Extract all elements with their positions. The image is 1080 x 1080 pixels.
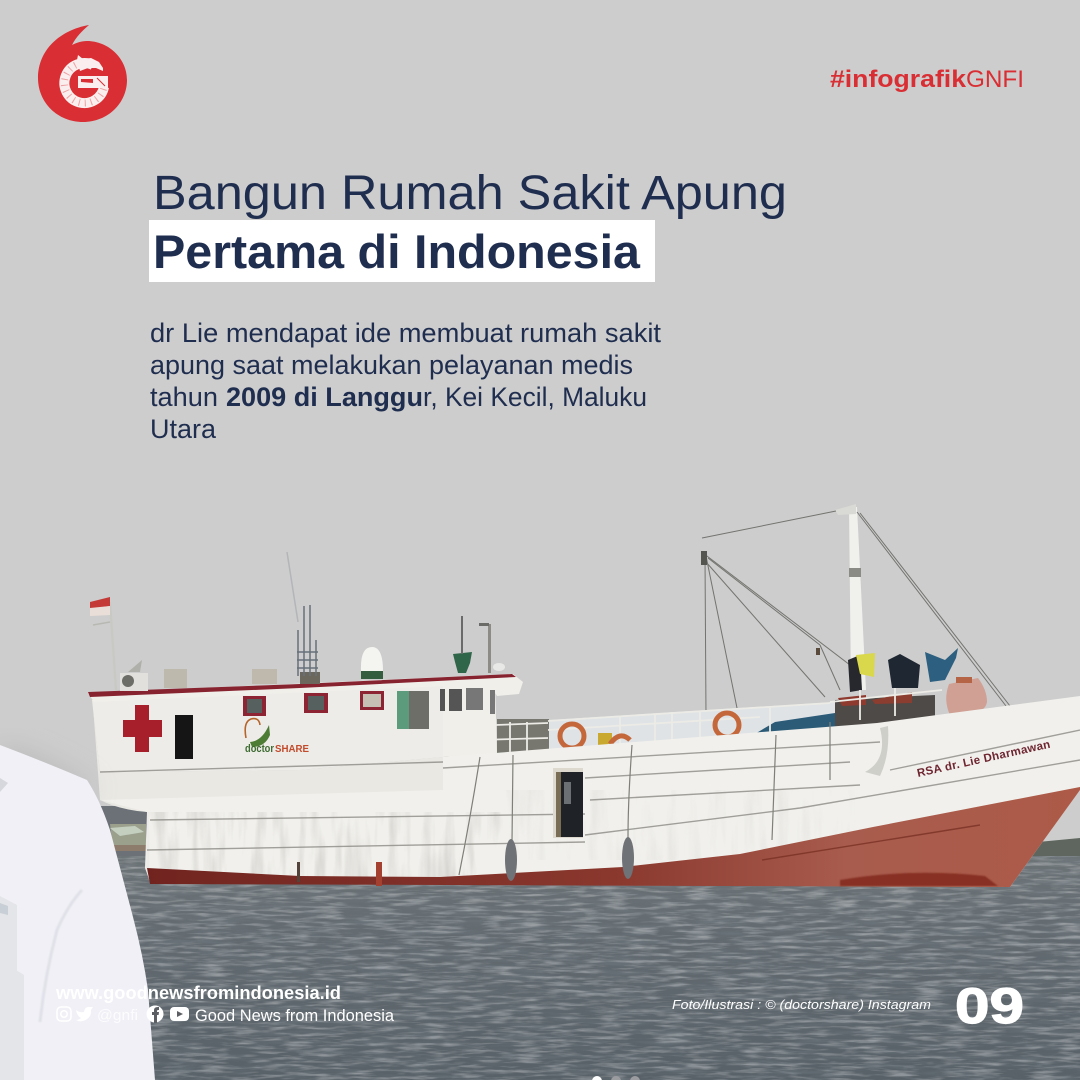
description text: Utara	[150, 414, 216, 444]
ship: flag mast	[90, 597, 142, 690]
hashtag	[830, 66, 1024, 93]
ship: roof equipment	[120, 552, 505, 691]
title line 1: Bangun Rumah Sakit Apung	[153, 167, 787, 220]
description text: tahun	[150, 382, 218, 412]
ship: fenders	[505, 837, 634, 881]
hashtag: GNFI	[966, 66, 1024, 93]
social handle: @gnfi	[97, 1007, 138, 1024]
hashtag: #infografik	[830, 66, 967, 93]
description text	[150, 318, 662, 444]
description text: 2009 di Langgu	[226, 382, 423, 412]
doctorSHARE logo on ship: SHARE	[275, 743, 309, 755]
ship: main hull	[100, 696, 1080, 887]
sea	[0, 856, 1080, 1080]
person in white coat	[0, 745, 155, 1080]
icon: facebook	[146, 1006, 164, 1023]
carousel dots	[592, 1076, 640, 1080]
ship: drying laundry	[848, 648, 958, 692]
doctorSHARE logo on ship	[245, 719, 309, 755]
icon: twitter	[76, 1007, 93, 1021]
ship: water tank	[946, 677, 987, 715]
ship: stern hull	[93, 706, 580, 884]
doctorSHARE logo on ship: doctor	[245, 743, 275, 755]
description text: apung saat melakukan pelayanan medis	[150, 350, 633, 380]
website url: www.goodnewsfromindonesia.id	[55, 983, 341, 1003]
ship photo	[88, 504, 1080, 887]
logo: eagle G emblem	[64, 55, 108, 103]
ship: cabin windows and doors	[175, 688, 495, 759]
social name: Good News from Indonesia	[195, 1006, 395, 1025]
photo credit: Foto/Ilustrasi : © (doctorshare) Instagram	[672, 997, 931, 1012]
title highlight	[149, 220, 655, 282]
ship: hull door	[553, 768, 583, 838]
title	[149, 167, 787, 282]
page number: 09	[955, 978, 1024, 1034]
ship: upper cabin	[88, 674, 523, 772]
description text: dr Lie mendapat ide membuat rumah sakit	[150, 318, 662, 348]
icon: instagram	[57, 1007, 71, 1021]
title line 2: Pertama di Indonesia	[153, 225, 641, 278]
ship: rust marks	[297, 862, 382, 886]
ship: life buoys	[472, 713, 739, 748]
logo GNFI	[38, 25, 127, 122]
description text: r, Kei Kecil, Maluku	[423, 382, 647, 412]
ship: mast and rigging	[701, 504, 1010, 716]
ship: red cross	[123, 705, 162, 752]
soft shadow behind person	[0, 745, 95, 800]
ship: mooring ropes	[459, 722, 830, 875]
icon: youtube	[170, 1007, 189, 1021]
ship name: RSA dr. Lie Dharmawan	[916, 739, 1051, 780]
distant shoreline	[100, 806, 1080, 861]
ship: deck cargo and rails	[443, 688, 942, 757]
ship: waterline paint	[147, 787, 1080, 887]
